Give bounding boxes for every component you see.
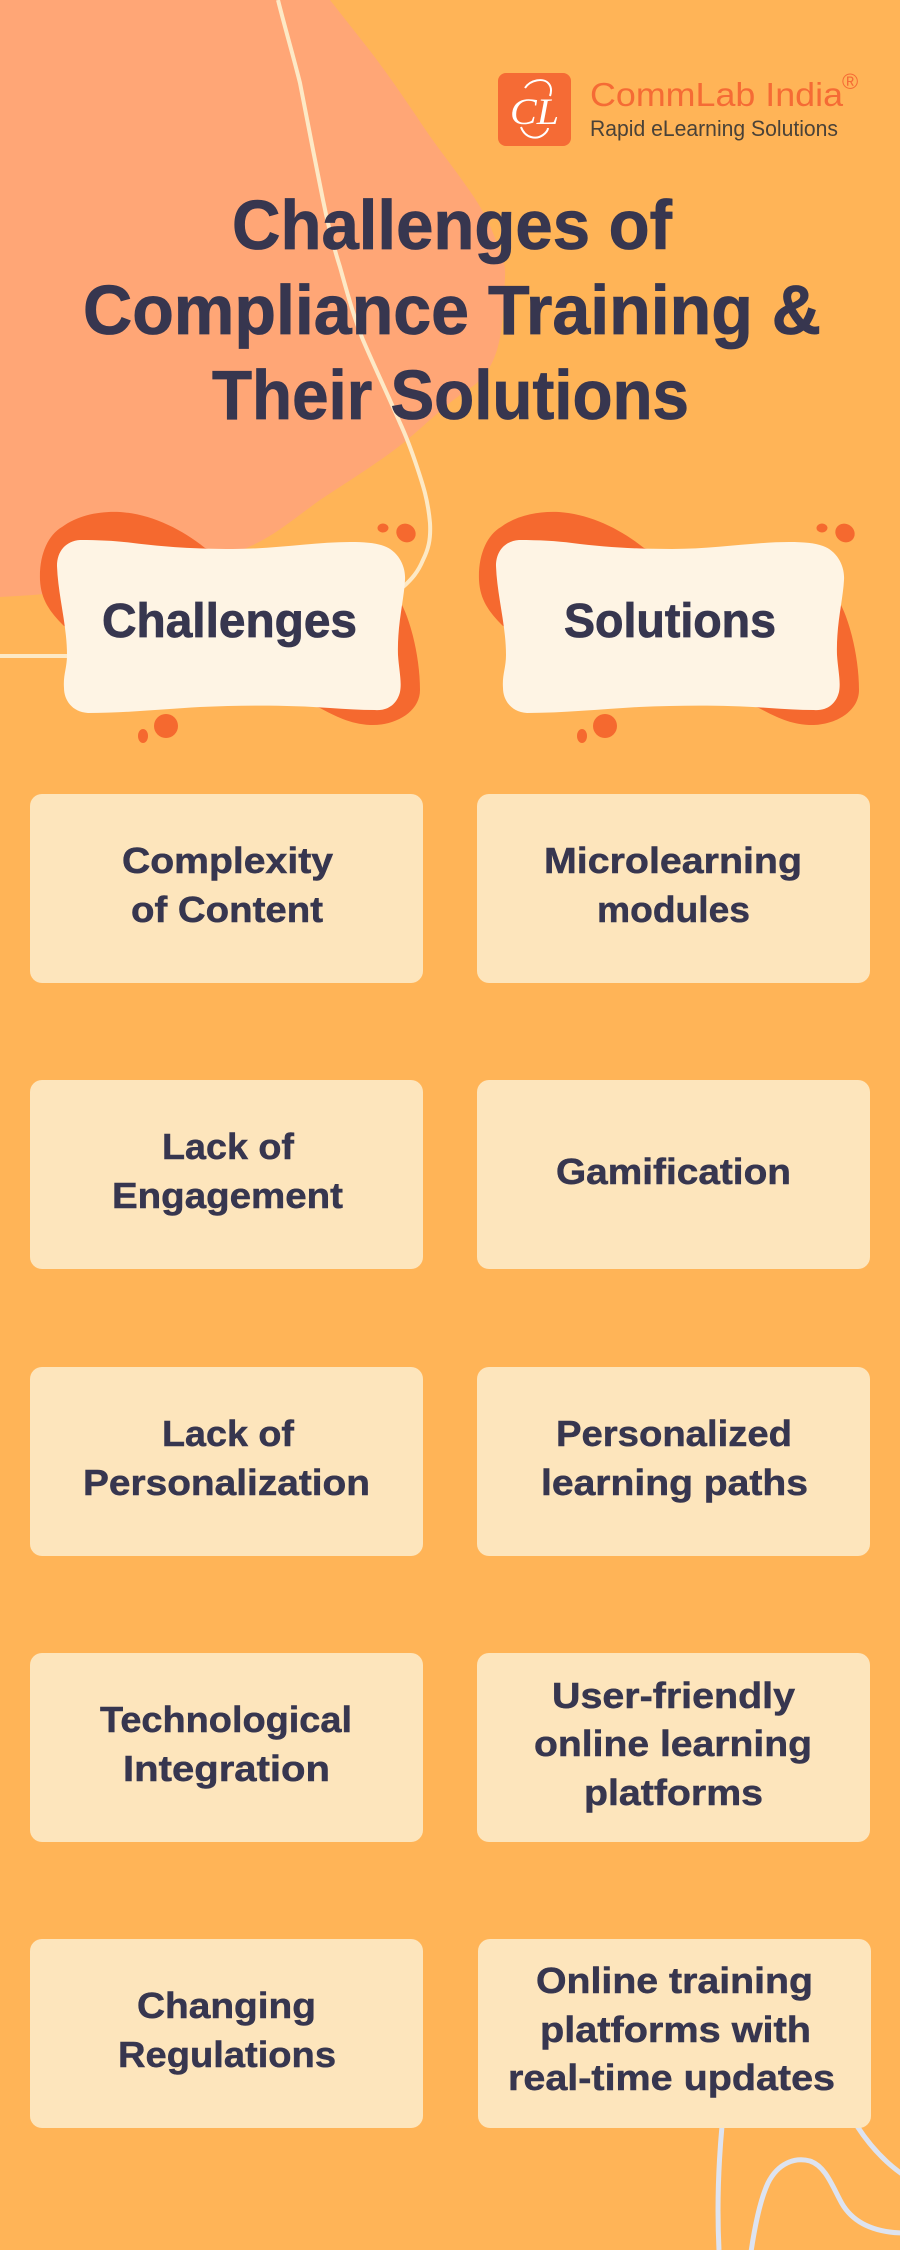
decorative cream curved line: [0, 0, 430, 656]
orange blob: [40, 512, 420, 725]
card: Online training platforms with real-time updates: real-time updates: [508, 2057, 835, 2098]
title: [83, 186, 821, 434]
tagline: Rapid eLearning Solutions: [590, 116, 838, 141]
card: Personalized learning paths: learning paths: [541, 1462, 808, 1503]
title: Their Solutions: [212, 356, 689, 434]
heading: Solutions: [564, 595, 776, 648]
card: Microlearning modules: modules: [597, 889, 750, 930]
decorative peach blob: [0, 0, 505, 597]
card: Technological Integration: [30, 1653, 423, 1842]
cream shape: [496, 540, 844, 713]
dots: [138, 520, 419, 743]
card: Online training platforms with real-time updates: [478, 1939, 871, 2128]
card: Lack of Personalization: Lack of: [162, 1413, 295, 1454]
card: Online training platforms with real-time updates: Online training: [536, 1960, 813, 2001]
card: Personalized learning paths: [477, 1367, 870, 1556]
icon: CL logo mark: CL: [510, 92, 559, 133]
card: Complexity of Content: [30, 794, 423, 983]
card: Gamification: [477, 1080, 870, 1269]
registered mark: ®: [842, 69, 858, 94]
panel: Solutions header badge: [479, 512, 859, 743]
cream shape: [57, 540, 405, 713]
dots: [577, 520, 858, 743]
card: Changing Regulations: Regulations: [118, 2034, 336, 2075]
decorative bottom lines: [718, 2126, 900, 2250]
card: Technological Integration: Integration: [123, 1748, 330, 1789]
card: Changing Regulations: [30, 1939, 423, 2128]
heading: Challenges: [102, 595, 357, 648]
card: Changing Regulations: Changing: [137, 1985, 316, 2026]
card: User-friendly online learning platforms: User-friendly: [552, 1675, 795, 1716]
card: Lack of Engagement: Lack of: [162, 1126, 295, 1167]
title: Compliance Training &: [83, 271, 821, 349]
card: Online training platforms with real-time updates: platforms with: [540, 2009, 811, 2050]
card: Lack of Engagement: Engagement: [112, 1175, 343, 1216]
card: Gamification: Gamification: [556, 1151, 791, 1192]
icon: CL logo mark: [498, 73, 571, 146]
card: Personalized learning paths: Personalized: [556, 1413, 792, 1454]
card: User-friendly online learning platforms: online learning: [534, 1723, 812, 1764]
panel: Challenges header badge: [40, 512, 420, 743]
card: Microlearning modules: [477, 794, 870, 983]
card: User-friendly online learning platforms: platforms: [584, 1772, 763, 1813]
card: Lack of Personalization: [30, 1367, 423, 1556]
card: Complexity of Content: Complexity: [122, 840, 333, 881]
card: Lack of Personalization: Personalization: [83, 1462, 370, 1503]
orange blob: [479, 512, 859, 725]
logo: CommLab India: [498, 69, 858, 146]
card: Microlearning modules: Microlearning: [544, 840, 802, 881]
card: Technological Integration: Technological: [100, 1699, 352, 1740]
card: User-friendly online learning platforms: [477, 1653, 870, 1842]
title: Challenges of: [232, 186, 673, 264]
brand name: CommLab India: [590, 76, 844, 113]
card: Complexity of Content: of Content: [131, 889, 323, 930]
card: Lack of Engagement: [30, 1080, 423, 1269]
